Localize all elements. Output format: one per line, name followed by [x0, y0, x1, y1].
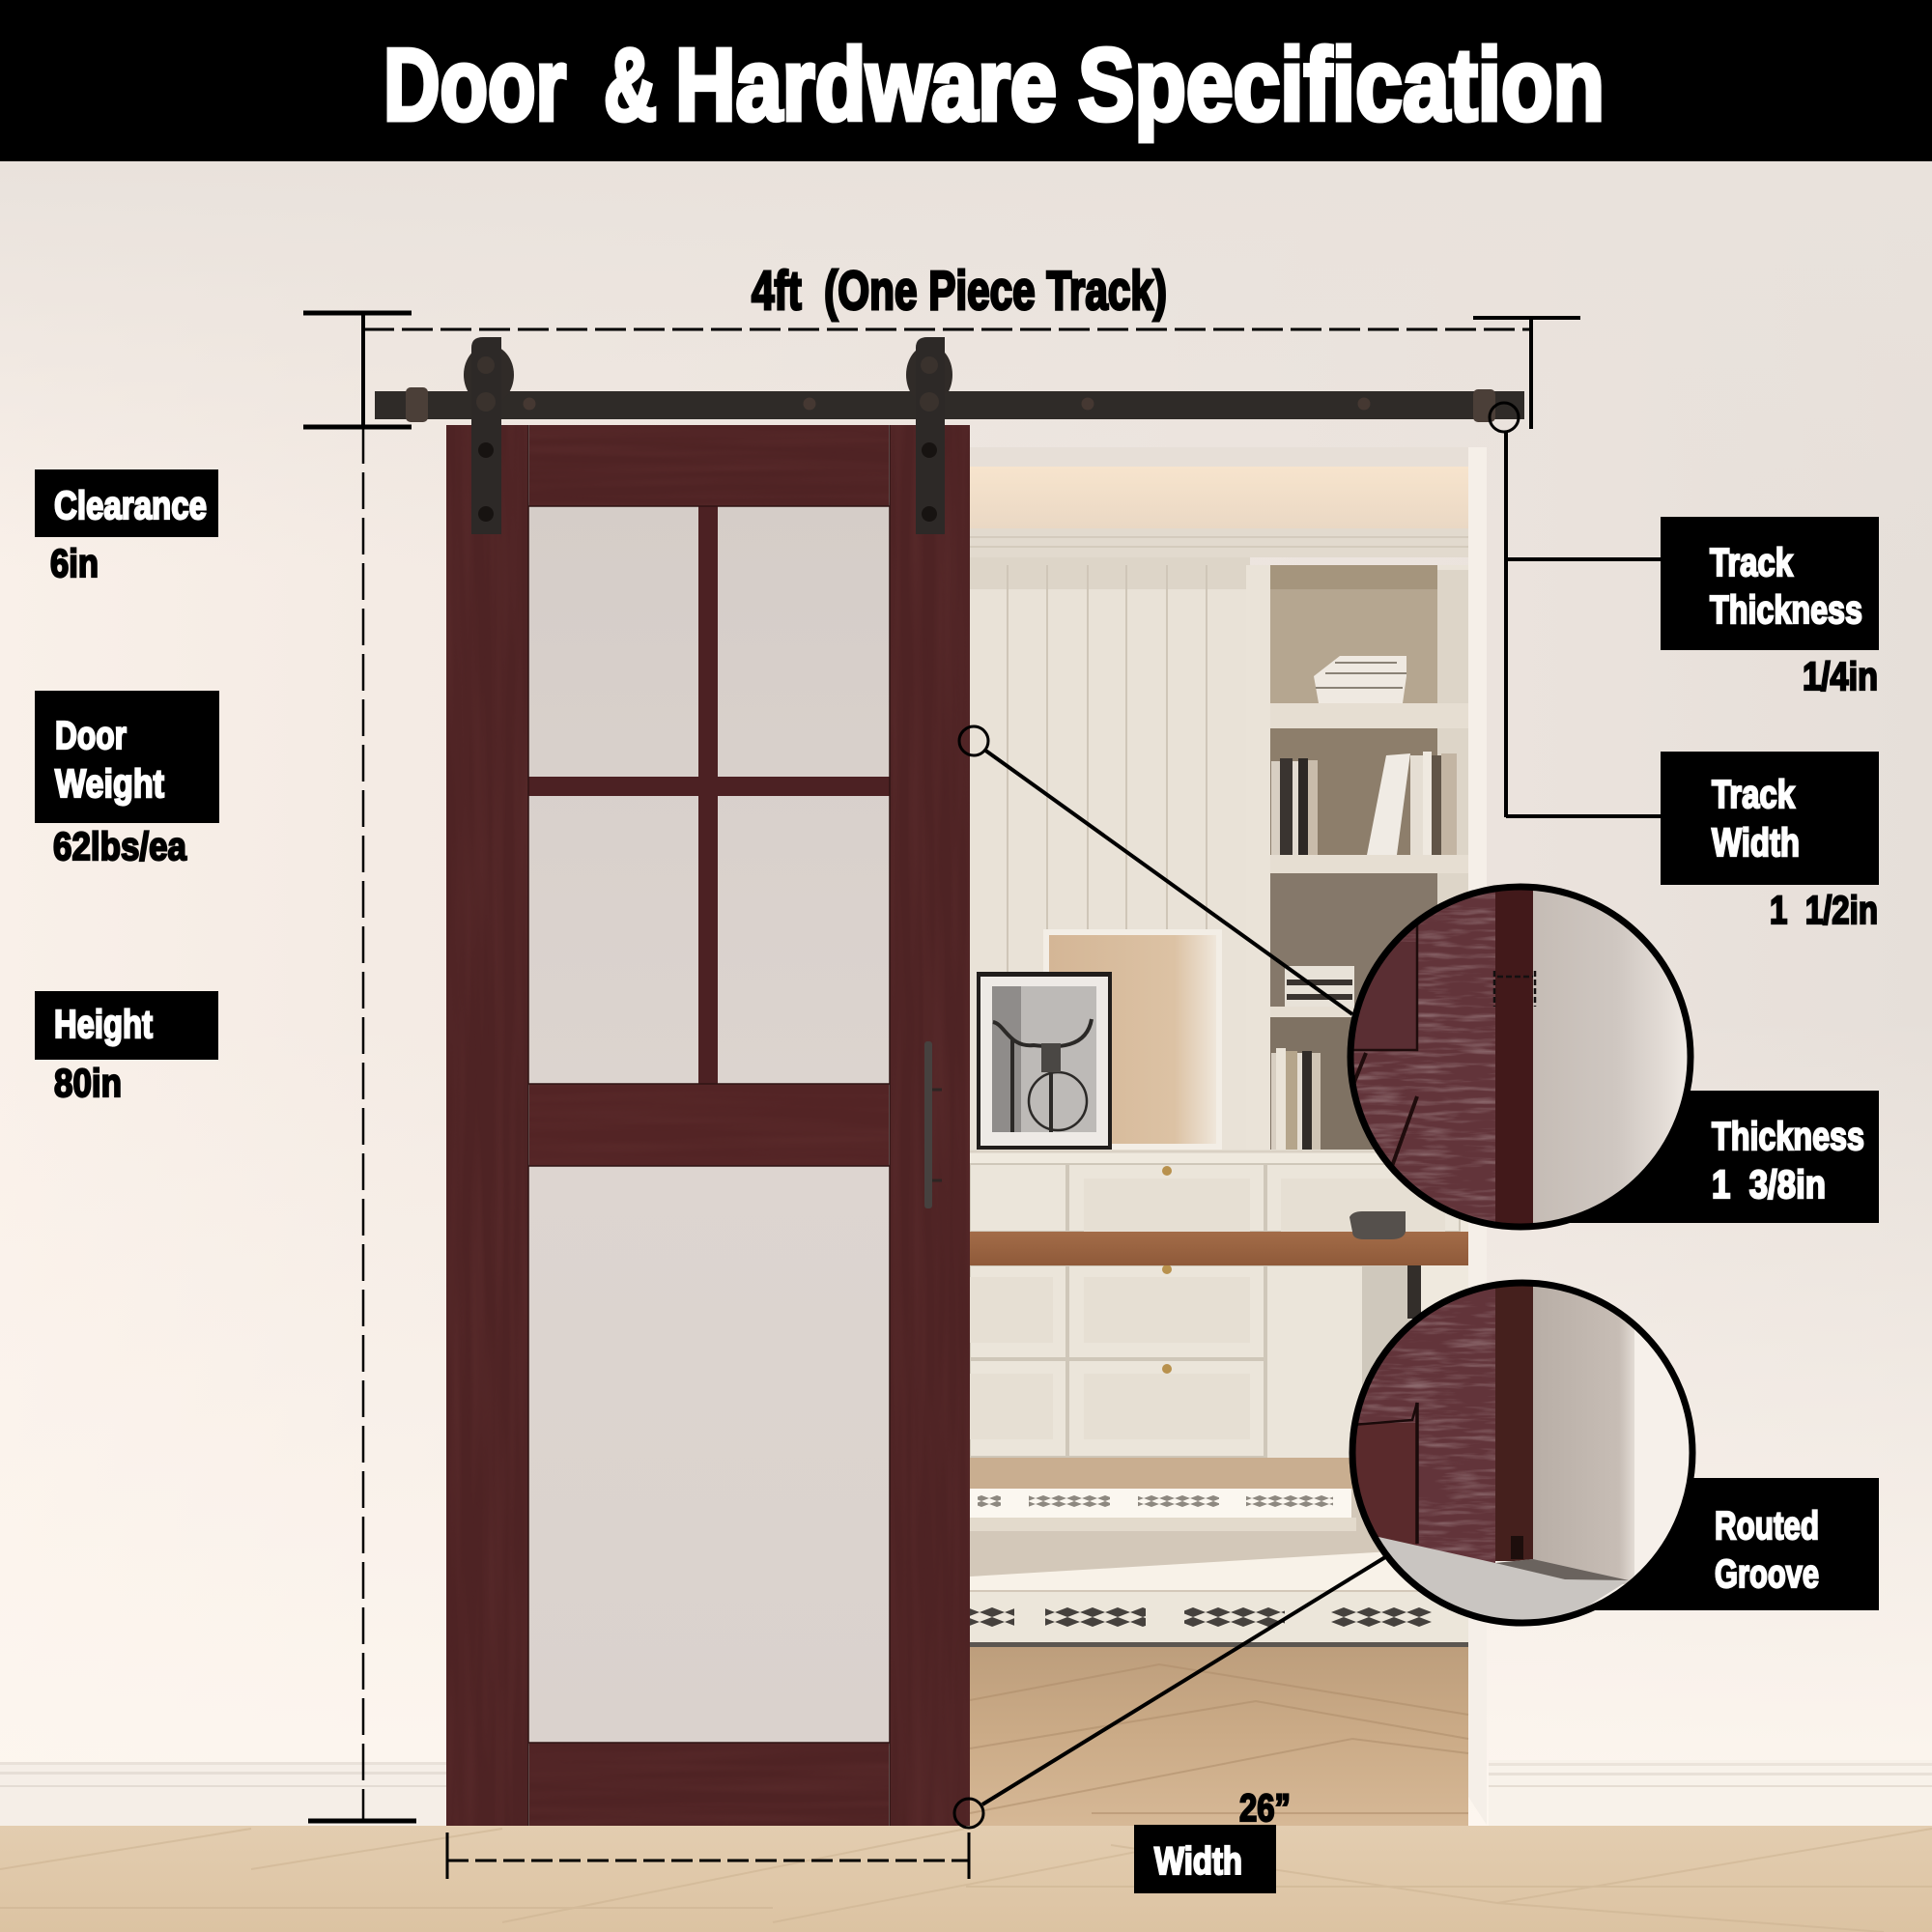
ceiling glow	[970, 467, 1468, 528]
callout lines: routed groove	[954, 1557, 1385, 1828]
label: door width: Width	[1154, 1840, 1242, 1883]
door opening jamb and ceiling	[970, 447, 1487, 1825]
label: clearance: 6in	[50, 541, 99, 585]
books on shelves	[1271, 656, 1457, 1150]
label: clearance	[35, 469, 218, 585]
bookcase	[1246, 565, 1468, 1154]
label: track thickness	[1661, 517, 1879, 698]
dimension: door width	[447, 1833, 969, 1879]
label: door weight: Weight	[55, 761, 164, 806]
label: door weight: 62lbs/ea	[53, 824, 187, 868]
floor	[0, 1826, 1932, 1932]
beadboard wall	[970, 557, 1250, 1156]
label: door width: 26”	[1239, 1787, 1291, 1830]
label: door weight	[35, 691, 219, 868]
track stops	[406, 387, 1495, 422]
label: height: 80in	[54, 1061, 122, 1105]
label: track width	[1661, 752, 1879, 932]
label: height	[35, 991, 218, 1105]
callout lines: track	[1490, 403, 1661, 817]
label: track thickness: 1/4in	[1803, 654, 1878, 698]
right hanger	[906, 337, 952, 534]
label: thickness: Thickness	[1712, 1114, 1864, 1158]
label: routed groove: Routed	[1715, 1503, 1819, 1548]
interior floor	[970, 1647, 1468, 1826]
cabinets	[970, 1150, 1468, 1464]
label: track width: Width	[1712, 820, 1800, 865]
baseboard left	[0, 1762, 446, 1826]
title banner: Hardware	[675, 28, 1057, 142]
framed pictures	[977, 929, 1222, 1150]
label: door width	[1134, 1787, 1291, 1893]
left hanger	[464, 337, 514, 534]
detail circle: routed groove	[1343, 1275, 1700, 1633]
door rails	[528, 425, 890, 1826]
label: track width: Track	[1712, 772, 1795, 816]
label: routed groove	[1546, 1478, 1879, 1610]
label: door weight: Door	[55, 713, 127, 757]
label: track thickness: Track	[1710, 540, 1793, 584]
floor strip and rug	[970, 1458, 1468, 1647]
label: track width: 1 1/2in	[1770, 888, 1878, 932]
label: thickness	[1546, 1091, 1879, 1223]
barn door	[446, 425, 970, 1826]
dimension: clearance and height left	[303, 313, 416, 1821]
label: thickness: 1 3/8in	[1712, 1162, 1826, 1207]
label: track thickness: Thickness	[1710, 587, 1862, 632]
title banner	[0, 0, 1932, 161]
crown moulding	[970, 528, 1468, 557]
glass panels	[527, 502, 891, 1746]
dimension: track length: 4ft (One Piece Track)	[752, 260, 1167, 322]
muntins	[527, 506, 891, 1086]
room interior	[970, 447, 1487, 1826]
door stiles	[446, 425, 970, 1826]
label: clearance: Clearance	[54, 483, 207, 527]
title banner: Door	[384, 28, 566, 142]
label: height: Height	[54, 1002, 153, 1046]
dimension: track right	[1473, 318, 1580, 429]
title banner: &	[604, 28, 657, 142]
label: routed groove: Groove	[1715, 1551, 1819, 1596]
title banner: Specification	[1078, 28, 1605, 142]
track rail	[375, 391, 1524, 419]
callout lines: door thickness	[959, 726, 1352, 1014]
door handle	[924, 1041, 942, 1208]
baseboard right	[1489, 1760, 1932, 1827]
detail circle: door thickness	[1343, 879, 1700, 1236]
track bolts	[524, 398, 1370, 410]
sliding track and hangers	[375, 337, 1524, 534]
desk	[970, 1211, 1468, 1319]
